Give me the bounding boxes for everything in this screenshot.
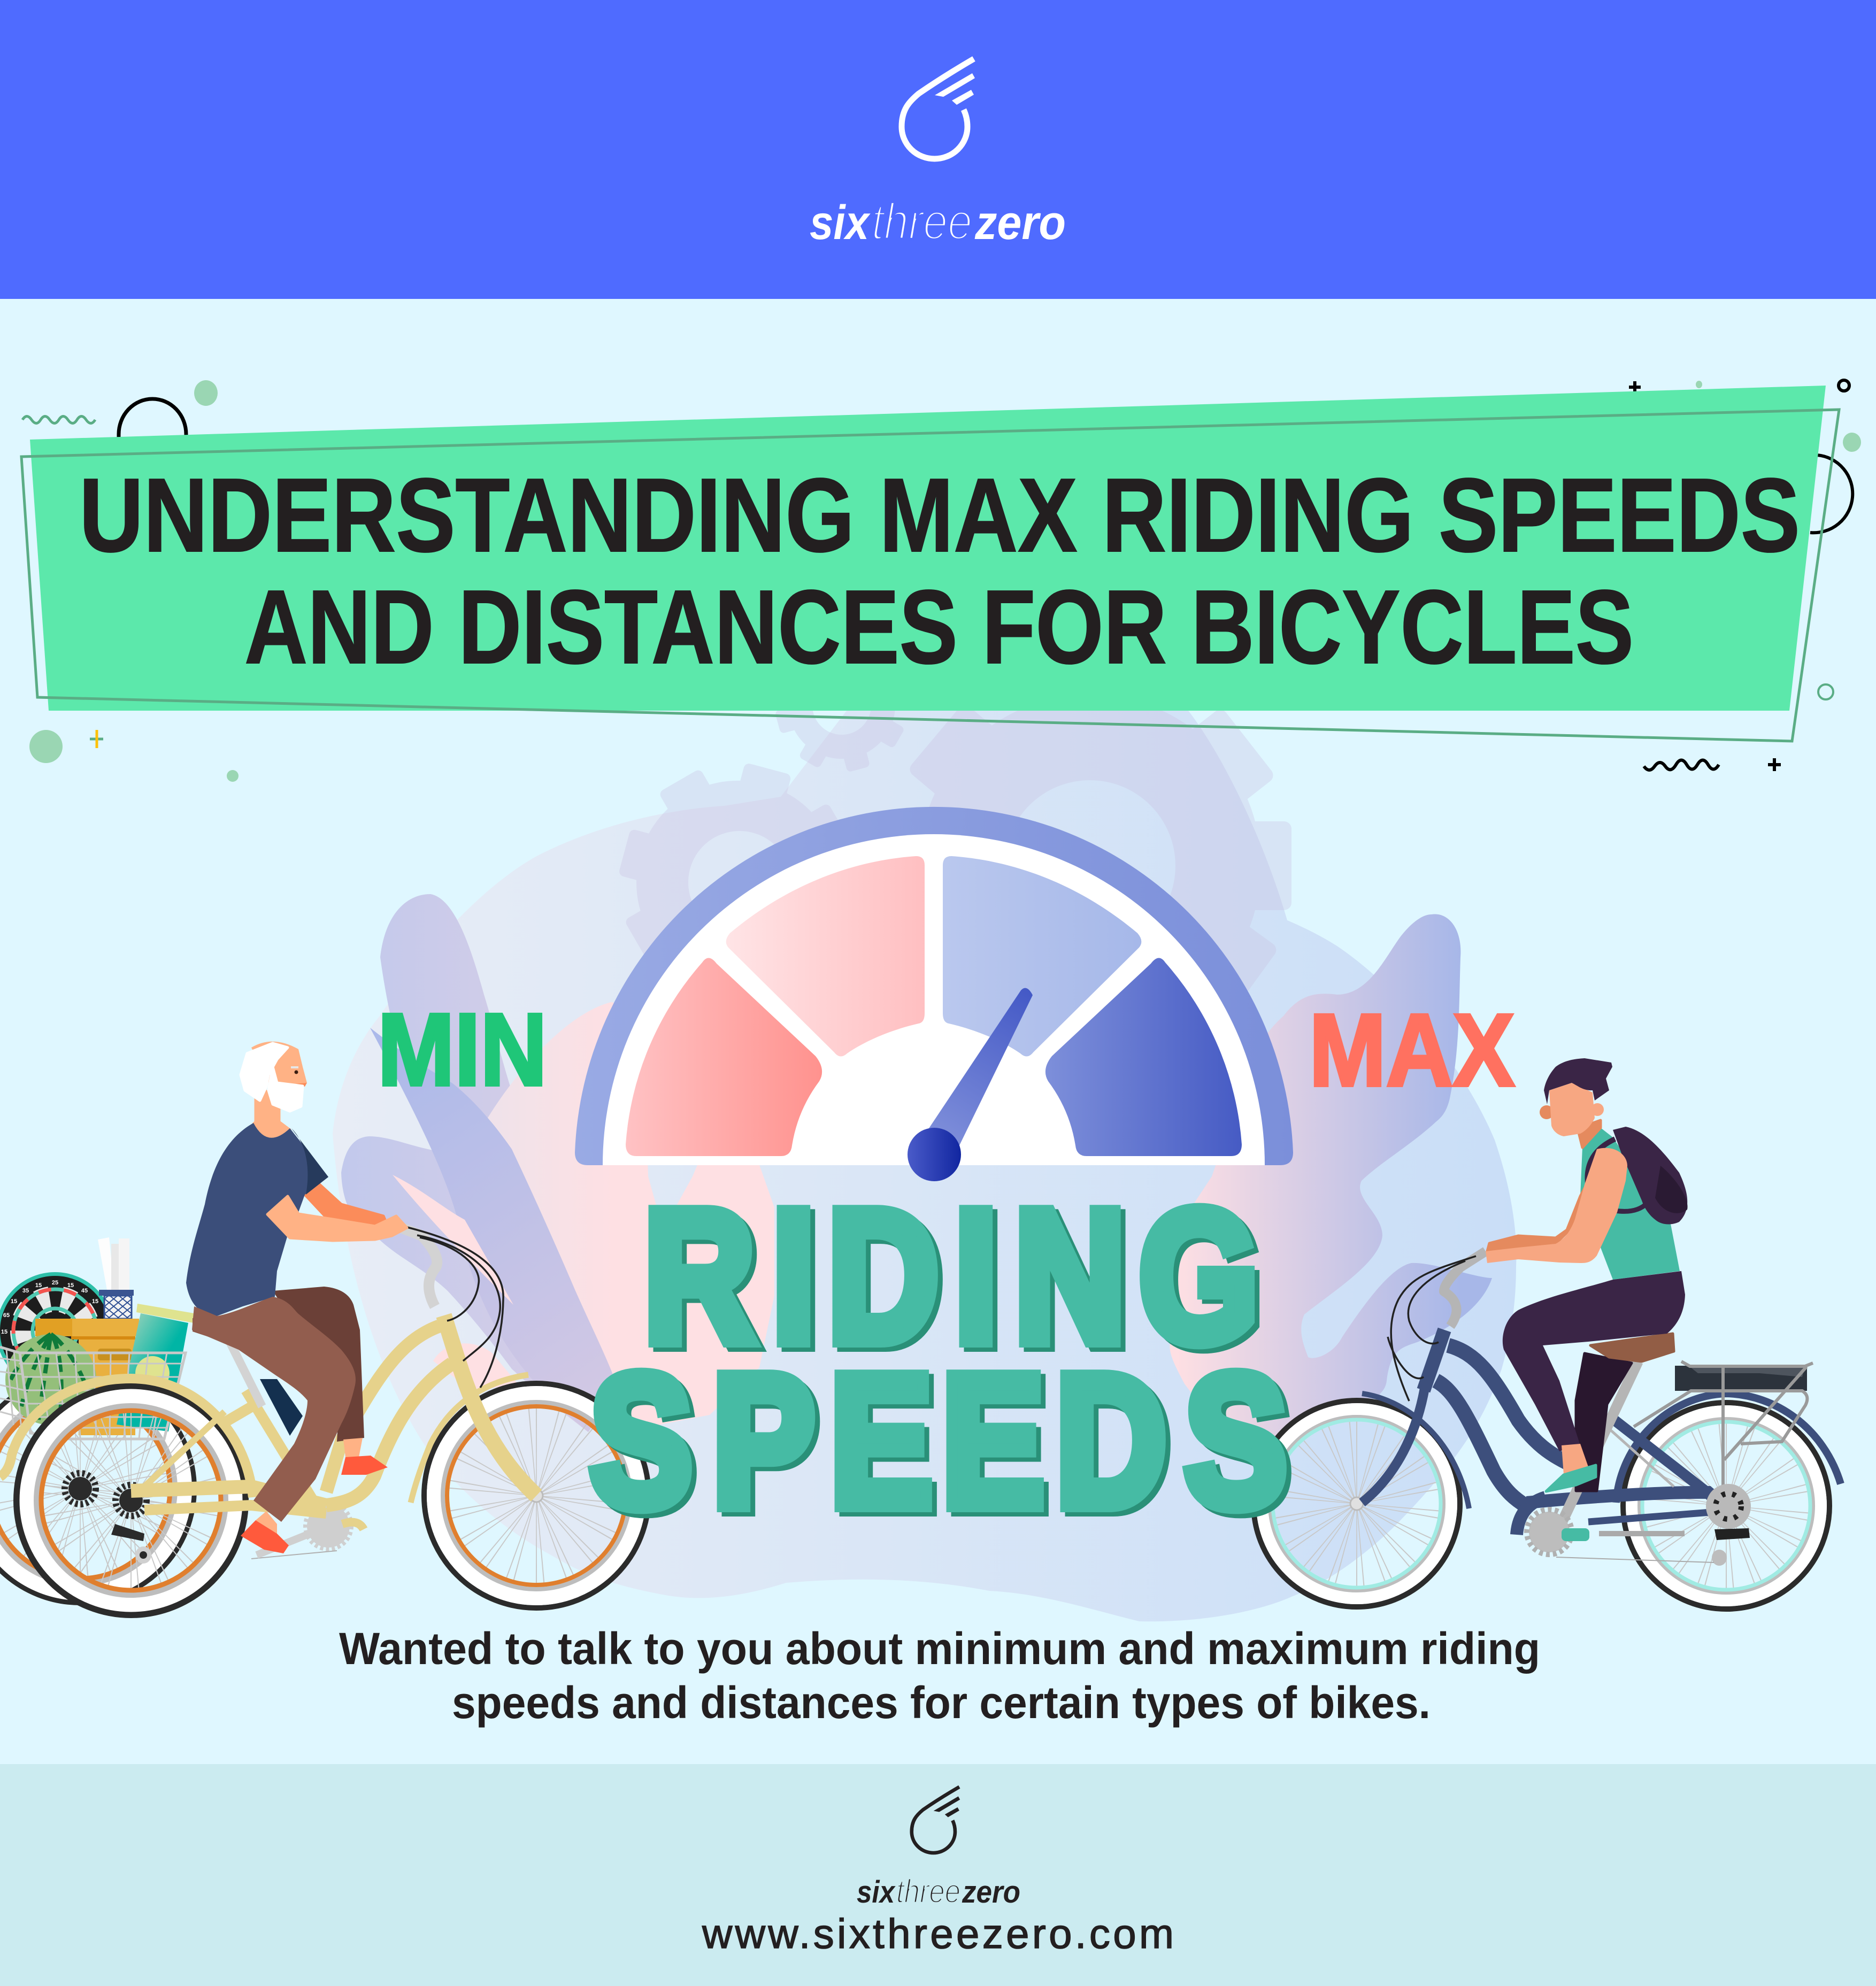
front leg — [1503, 1271, 1685, 1451]
rear wheel — [1623, 1403, 1829, 1609]
battery — [260, 1379, 303, 1436]
dartboard in basket — [0, 1272, 114, 1390]
left lavender lobes and pink flame — [341, 894, 774, 1432]
white hair — [241, 1043, 288, 1100]
dartboard in basket: 45 — [81, 1288, 88, 1294]
MIN label: MIN — [378, 992, 547, 1107]
neck — [1578, 1120, 1601, 1148]
small gear — [775, 652, 905, 772]
rear fender — [0, 1379, 253, 1497]
RIDING SPEEDS heading: RIDING — [644, 1171, 1258, 1380]
gray seat post and handlebar — [1444, 1251, 1674, 1540]
sleeve shadow — [291, 1128, 328, 1195]
green title banner — [30, 386, 1826, 711]
front wheel — [1254, 1400, 1460, 1607]
brake cables — [407, 1227, 503, 1388]
gray seat post and handlebar — [230, 1225, 437, 1406]
intro paragraph: speeds and distances for certain types of bikes. — [452, 1677, 1431, 1728]
footer wordmark — [857, 1873, 1020, 1910]
gauge segment: medium low speed — [726, 856, 925, 1057]
dartboard in basket: 15 — [67, 1282, 74, 1289]
rear rack and battery — [1634, 1361, 1813, 1498]
navy bike frame — [1362, 1330, 1724, 1535]
wire basket — [0, 1347, 186, 1439]
crank, sprocket and chain — [1527, 1484, 1751, 1566]
orange box — [35, 1319, 139, 1435]
near arm — [267, 1196, 407, 1241]
rolled papers — [98, 1237, 129, 1290]
ankle — [1562, 1444, 1588, 1475]
logo wordmark: six — [810, 196, 871, 250]
front wheel — [424, 1383, 649, 1608]
seat — [193, 1318, 238, 1342]
brake cables — [1388, 1256, 1476, 1401]
gauge white face — [603, 834, 1265, 1165]
cream bike frame — [131, 1315, 536, 1529]
decorative left black arc — [119, 399, 186, 449]
footer wordmark: three — [896, 1873, 960, 1910]
logo wordmark: three — [872, 193, 972, 250]
gauge outer arch — [575, 807, 1293, 1165]
decorative right black arc — [1810, 455, 1852, 533]
gauge hub — [908, 1128, 961, 1181]
left tricycle rider — [0, 1042, 649, 1615]
medium gear — [618, 763, 852, 984]
rear far wheel — [0, 1375, 194, 1603]
footer logo icon — [912, 1787, 960, 1853]
RIDING SPEEDS shadow: SPEEDS — [595, 1340, 1291, 1549]
front fender — [411, 1375, 528, 1503]
fenders — [1362, 1394, 1841, 1508]
shirt — [186, 1123, 328, 1316]
MAX label: MAX — [1309, 992, 1514, 1107]
dartboard in basket: 65 — [3, 1312, 10, 1319]
eye and brow — [291, 1066, 298, 1074]
dartboard in basket: 15 — [35, 1282, 42, 1289]
footer wordmark: zero — [962, 1875, 1020, 1910]
watermelon — [5, 1334, 96, 1425]
background blob — [333, 706, 1516, 1621]
far arm — [1487, 1188, 1585, 1251]
background gears — [618, 652, 1291, 1037]
torso — [1580, 1128, 1680, 1280]
ankle and front shoe — [241, 1511, 289, 1553]
blue crate — [99, 1290, 134, 1319]
logo wordmark: zero — [974, 196, 1066, 250]
gauge segment: medium high speed — [943, 856, 1141, 1057]
big gear — [907, 664, 1291, 1037]
back leg — [1576, 1353, 1632, 1491]
dartboard in basket: 35 — [22, 1288, 29, 1294]
footer website URL: www.sixthreezero.com — [702, 1910, 1174, 1957]
crank and chain — [251, 1503, 351, 1559]
RIDING SPEEDS shadow: RIDING — [649, 1175, 1263, 1384]
right lavender lobe — [1170, 914, 1492, 1447]
hair — [1544, 1058, 1612, 1104]
right cyclist — [1254, 1058, 1841, 1609]
back leg and shoe — [273, 1287, 388, 1475]
head — [1540, 1083, 1604, 1136]
logo wordmark — [810, 193, 1066, 250]
rear near wheel — [17, 1386, 245, 1615]
gauge needle — [929, 988, 1033, 1145]
saddle — [1590, 1334, 1674, 1361]
RIDING SPEEDS heading — [590, 1171, 1287, 1545]
rider: young cyclist — [1486, 1058, 1688, 1491]
teal cup — [117, 1304, 194, 1431]
dartboard in basket: 15 — [1, 1329, 7, 1335]
decorative confetti: dots, pluses and squiggles — [22, 380, 1861, 782]
near arm — [1486, 1148, 1627, 1263]
beard — [268, 1067, 303, 1111]
neck — [253, 1083, 290, 1142]
footer band — [0, 1764, 1876, 1986]
front leg — [192, 1297, 356, 1522]
banner outline — [21, 410, 1839, 741]
rider: old man — [186, 1042, 407, 1553]
backpack — [1587, 1127, 1688, 1225]
dartboard in basket: 15 — [11, 1298, 17, 1305]
dartboard in basket: 15 — [92, 1298, 98, 1305]
RIDING SPEEDS heading: SPEEDS — [590, 1336, 1287, 1545]
icon: sixthreezero winged logo — [902, 59, 975, 159]
RIDING SPEEDS shadow — [595, 1175, 1291, 1549]
header band — [0, 0, 1876, 299]
footer wordmark: six — [857, 1875, 896, 1910]
head — [251, 1042, 307, 1087]
gauge segment: high speed — [1045, 958, 1242, 1156]
rear sprockets and derailleur — [65, 1473, 151, 1564]
gauge segment: low speed — [626, 958, 822, 1156]
title: AND DISTANCES FOR BICYCLES — [244, 568, 1634, 686]
far arm — [305, 1181, 388, 1228]
title — [79, 457, 1800, 686]
dartboard in basket: 25 — [52, 1280, 58, 1286]
intro paragraph — [339, 1623, 1540, 1728]
shoe — [1546, 1465, 1596, 1491]
speedometer gauge — [575, 807, 1293, 1181]
intro paragraph: Wanted to talk to you about minimum and maximum riding — [339, 1623, 1540, 1674]
